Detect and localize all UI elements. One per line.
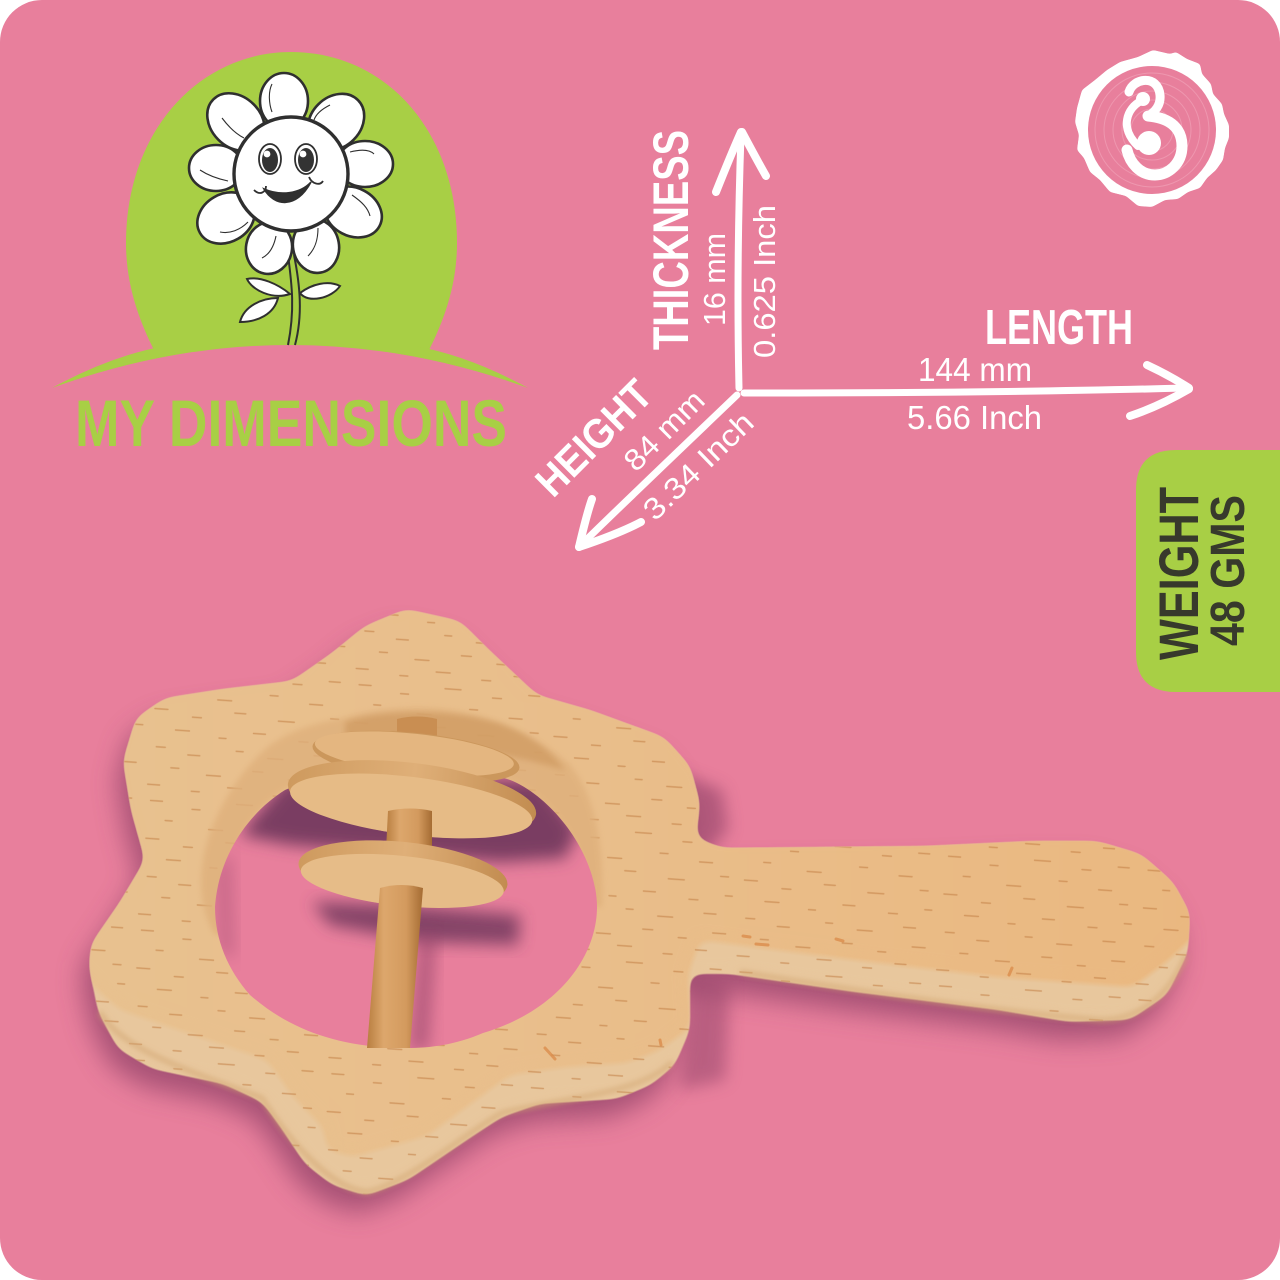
arrow: height bbox=[579, 395, 737, 547]
inner ring wall bbox=[201, 708, 602, 935]
rod nub bbox=[397, 716, 437, 742]
label: 5.66 inch: 5.66 Inch bbox=[907, 399, 1042, 436]
lower rod bbox=[367, 885, 423, 1048]
wood grain bbox=[85, 605, 1195, 1205]
lower wooden disc bbox=[295, 831, 511, 917]
body top surface bbox=[74, 595, 1204, 1157]
label: 0.625 inch: 0.625 Inch bbox=[747, 205, 782, 358]
middle rod segment bbox=[386, 808, 432, 850]
logo: my dimensions flower badge bbox=[52, 52, 528, 460]
label: weight: WEIGHT bbox=[1147, 487, 1210, 660]
label: height: HEIGHT bbox=[526, 370, 661, 505]
body side bbox=[89, 609, 1190, 1196]
label: length: LENGTH bbox=[985, 301, 1133, 355]
label: 3.34 inch: 3.34 Inch bbox=[637, 406, 761, 527]
arrow: thickness bbox=[716, 132, 766, 388]
label: 84 mm: 84 mm bbox=[618, 384, 712, 478]
green dome bbox=[52, 52, 528, 392]
label: thickness: THICKNESS bbox=[643, 130, 699, 350]
shadows bbox=[82, 631, 1180, 1213]
bottom edge tone bbox=[100, 955, 1186, 1192]
rattle body bbox=[74, 595, 1204, 1205]
wooden rattle photo bbox=[74, 595, 1204, 1213]
label: 48 gms: 48 GMS bbox=[1202, 495, 1255, 646]
wood flecks bbox=[545, 936, 1012, 1059]
arrow: length bbox=[744, 365, 1189, 416]
icon: smiling flower bbox=[188, 73, 393, 345]
middle wooden disc bbox=[284, 748, 540, 850]
icon: brand logo bbox=[1075, 50, 1229, 207]
shadows inside ring bbox=[215, 770, 597, 1050]
weight tab bbox=[1136, 450, 1280, 692]
label: 16 mm: 16 mm bbox=[697, 233, 732, 326]
dark wall top bbox=[345, 712, 565, 770]
title: my dimensions: MY DIMENSIONS bbox=[75, 386, 507, 460]
top wooden disc bbox=[310, 722, 522, 792]
dimensions diagram bbox=[526, 130, 1189, 547]
label: 144 mm: 144 mm bbox=[918, 351, 1032, 388]
